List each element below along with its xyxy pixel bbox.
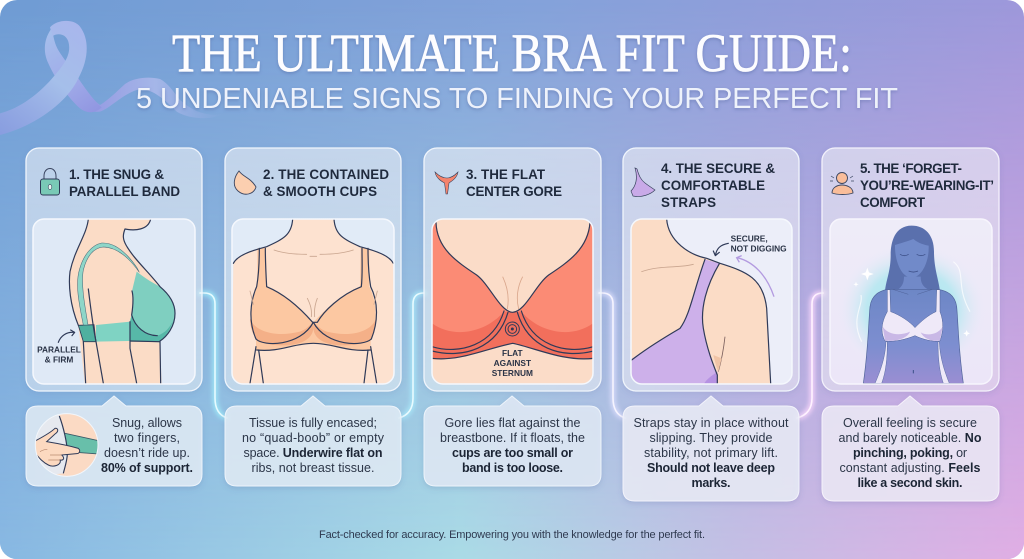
subtitle: 5 UNDENIABLE SIGNS TO FINDING YOUR PERFECT FIT [136,83,898,115]
text [101,416,193,475]
connector: card 3 to callout 4 [599,293,625,418]
panel: sign 4 straps [623,148,799,391]
heading [263,167,389,199]
heading: 3. THE FLAT [466,167,546,182]
text: Overall feeling is secure [843,416,977,430]
text: doesn’t ride up. [104,446,190,460]
text: band is too loose. [462,461,563,475]
callout: sign 1 [26,396,202,486]
text: Straps stay in place without [634,416,789,430]
label: parallel and firm: & FIRM [45,354,73,364]
text: two fingers, [114,431,180,445]
callout: sign 5 [822,396,999,501]
text [242,416,385,475]
illustration: woman at ease [830,219,992,384]
label: parallel and firm [37,345,81,364]
connector: card 1 to callout 2 [200,293,227,418]
icon: bra strap [631,168,655,197]
callout: sign 3 [424,396,601,486]
text: slipping. They provide [650,431,773,445]
connector: callout 2 to card 3 [399,293,424,418]
text: breastbone. If it floats, the [440,431,585,445]
icon: center gore [435,172,458,194]
text: Gore lies flat against the [444,416,581,430]
title: THE ULTIMATE BRA FIT GUIDE: [172,23,852,83]
text: pinching, poking, or [853,446,967,460]
icon: hand checking band [34,413,98,477]
heading: PARALLEL BAND [69,184,180,199]
heading: YOU’RE-WEARING-IT’ [860,178,994,193]
text [634,416,789,490]
label: secure, not digging: NOT DIGGING [731,243,787,253]
label: flat against sternum: STERNUM [492,368,533,378]
label: flat against sternum: AGAINST [494,358,531,368]
label: flat against sternum: FLAT [502,348,523,358]
heading [860,161,994,210]
text: constant adjusting. Feels [840,461,981,475]
panel: sign 1 band [26,148,202,391]
callout: sign 2 [225,396,401,486]
text: Tissue is fully encased; [249,416,377,430]
illustration: front view cups [232,218,395,385]
text: ribs, not breast tissue. [252,461,374,475]
heading: CENTER GORE [466,184,562,199]
heading: & SMOOTH CUPS [263,184,377,199]
illustration: shoulder strap [630,218,792,385]
heading: 1. THE SNUG & [69,167,164,182]
text [440,416,585,475]
heading: COMFORT [860,195,926,210]
label: secure, not digging: SECURE, [731,233,768,243]
connector: callout 4 to card 5 [797,293,823,418]
text: cups are too small or [452,446,573,460]
label: secure, not digging [731,233,787,253]
text: stability, not primary lift. [644,446,778,460]
illustration: flat gore [430,218,595,384]
label: flat against sternum [492,348,533,378]
text: like a second skin. [858,476,962,490]
heading: STRAPS [661,195,716,210]
text: Should not leave deep [647,461,775,475]
text: and barely noticeable. No [838,431,982,445]
panel: sign 3 gore [424,148,601,391]
text: Snug, allows [112,416,182,430]
heading: 5. THE ‘FORGET- [860,161,962,176]
panel: sign 5 comfort [822,148,999,391]
illustration: side view band [33,218,195,385]
heading [661,161,775,210]
icon: awareness ribbon [0,21,223,135]
text: no “quad-boob” or empty [242,431,385,445]
heading: 4. THE SECURE & [661,161,775,176]
text: space. Underwire flat on [244,446,382,460]
heading [466,167,562,199]
icon: breast cup [234,171,256,194]
text: 80% of support. [101,461,193,475]
footer note: Fact-checked for accuracy. Empowering you with the knowledge for the perfect fit. [319,529,705,541]
icon: padlock [40,168,60,195]
panel: sign 2 cups [225,148,401,391]
icon: calm person [830,172,854,194]
text: marks. [692,476,730,490]
heading: COMFORTABLE [661,178,765,193]
callout: sign 4 [623,396,799,501]
heading [69,167,180,199]
heading: 2. THE CONTAINED [263,167,389,182]
label: parallel and firm: PARALLEL [37,345,81,355]
text [838,416,982,490]
